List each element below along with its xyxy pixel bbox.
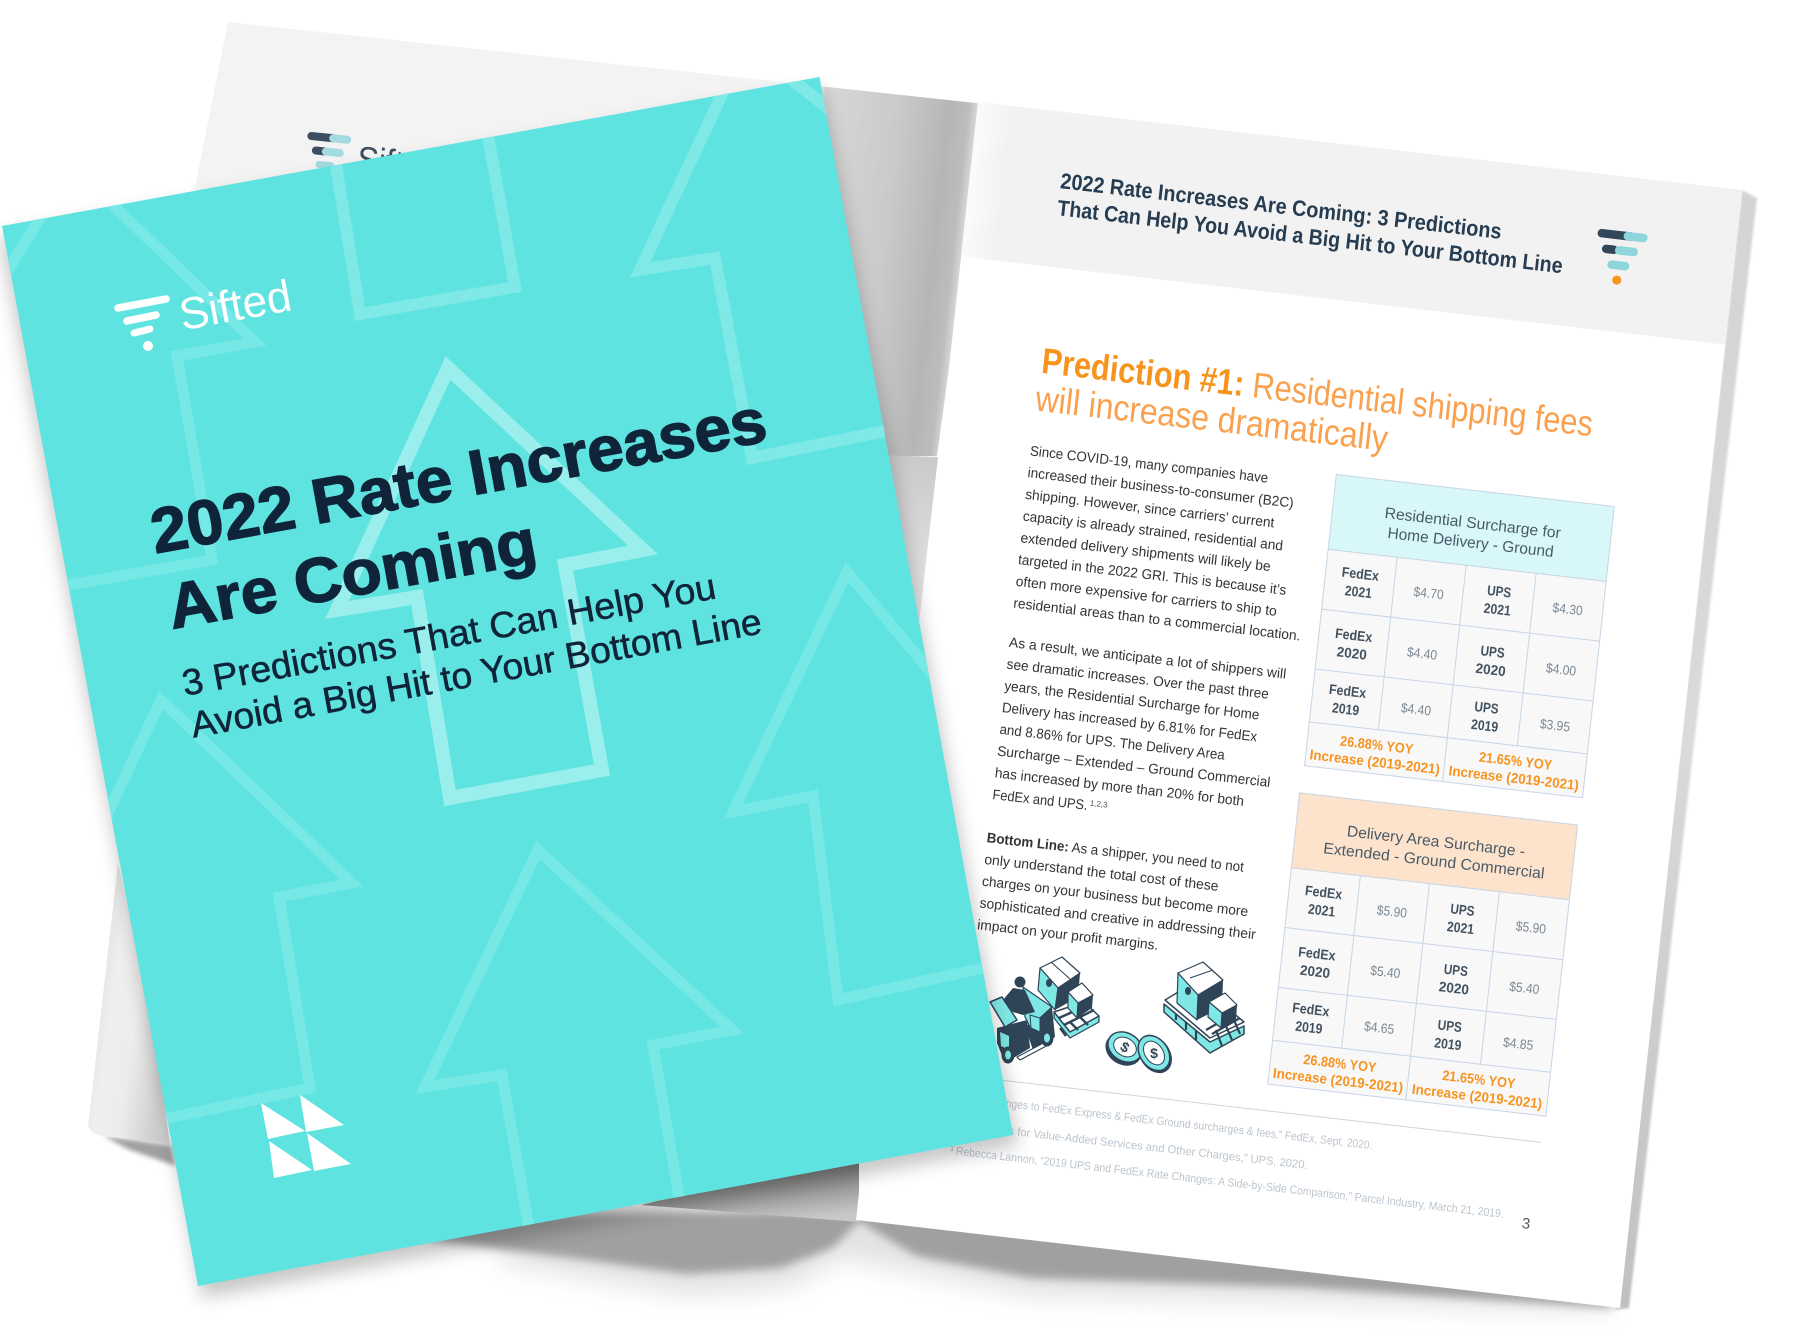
table: residential surcharge: Increase (2019-2021) <box>1309 746 1441 777</box>
table: delivery area surcharge: $4.85 <box>1502 1035 1534 1053</box>
cover title: 2022 Rate Increases <box>145 386 772 567</box>
forklift body <box>990 976 1055 1064</box>
table: delivery area surcharge: $5.40 <box>1370 963 1401 981</box>
table: delivery area surcharge: 2019 <box>1295 1018 1323 1037</box>
table header <box>1328 475 1614 581</box>
table: residential surcharge: 2021 <box>1344 582 1373 601</box>
table: residential surcharge: 2020 <box>1475 660 1507 679</box>
body paragraph 1: often more expensive for carriers to ship to <box>1015 573 1278 619</box>
table header: Home Delivery - Ground <box>1387 525 1555 561</box>
footnotes: ¹ “Changes to FedEx Express & FedEx Ground surcharges & fees,” FedEx, Sept. 2020. <box>977 1095 1373 1152</box>
table: delivery area surcharge: 2021 <box>1307 901 1336 920</box>
table: residential surcharge: FedEx <box>1341 564 1380 584</box>
header title: 2022 Rate Increases Are Coming: 3 Predictions <box>1059 168 1503 244</box>
table: delivery area surcharge: 26.88% YOY <box>1303 1051 1378 1075</box>
body paragraph 2: and 8.86% for UPS. The Delivery Area <box>999 721 1226 763</box>
table: residential surcharge: $4.30 <box>1552 600 1583 618</box>
table: delivery area surcharge: 2021 <box>1446 918 1475 937</box>
bottom line paragraph: only understand the total cost of these <box>984 851 1220 894</box>
table: delivery area surcharge: 2020 <box>1438 978 1470 998</box>
header title: That Can Help You Avoid a Big Hit to Your Bottom Line <box>1056 195 1564 278</box>
body paragraph 1: increased their business-to-consumer (B2C) <box>1027 464 1295 511</box>
table: residential surcharge <box>1305 475 1614 798</box>
table: residential surcharge: $4.00 <box>1545 660 1577 679</box>
table: delivery area surcharge: FedEx <box>1298 943 1336 964</box>
shadow under spine and cover <box>103 1136 1612 1312</box>
body paragraph 2: 1,2,3 <box>1089 799 1109 810</box>
table: delivery area surcharge: UPS <box>1450 900 1475 919</box>
body paragraph 1: capacity is already strained, residential and <box>1022 508 1284 553</box>
illustration: coins: $ <box>1118 1038 1133 1056</box>
table: delivery area surcharge: $4.65 <box>1363 1019 1395 1037</box>
page number: 3 <box>1521 1215 1531 1233</box>
illustration: coins <box>1100 1025 1179 1080</box>
table: residential surcharge: $4.40 <box>1400 700 1432 719</box>
illustration: boxes on pallet <box>1164 962 1244 1053</box>
cover subtitle: 3 Predictions That Can Help You <box>179 566 719 704</box>
table: residential surcharge: 2020 <box>1336 643 1368 663</box>
table: residential surcharge: 2021 <box>1483 600 1512 619</box>
table: delivery area surcharge: FedEx <box>1292 999 1330 1019</box>
table: residential surcharge: Increase (2019-2021) <box>1448 762 1580 793</box>
body paragraph 2: see dramatic increases. Over the past three <box>1006 656 1270 702</box>
pallet <box>1164 985 1244 1053</box>
table: delivery area surcharge: 2020 <box>1299 962 1331 981</box>
bottom line paragraph <box>977 829 1264 964</box>
background arrow outlines <box>0 78 1010 1290</box>
heading: prediction 1: Prediction #1: Residential shipping fees <box>1040 340 1595 444</box>
footnotes: ² “Rates for Value-Added Services and Other Charges,” UPS, 2020. <box>974 1122 1308 1172</box>
left page logo <box>303 132 441 187</box>
body paragraph 2 <box>992 634 1287 834</box>
page header band <box>961 102 1742 345</box>
bottom line paragraph: Bottom Line: As a shipper, you need to not <box>986 829 1245 875</box>
table: delivery area surcharge: FedEx <box>1304 882 1343 902</box>
table: residential surcharge: $3.95 <box>1539 716 1571 735</box>
body paragraph 1: targeted in the 2022 GRI. This is because it’s <box>1017 551 1287 598</box>
body paragraph 2: FedEx and UPS. <box>992 786 1088 813</box>
table: delivery area surcharge: $5.90 <box>1515 918 1547 937</box>
table: delivery area surcharge: Increase (2019-2021) <box>1272 1065 1404 1096</box>
table: residential surcharge: FedEx <box>1334 625 1373 645</box>
table: delivery area surcharge: $5.90 <box>1376 902 1408 921</box>
table: residential surcharge: UPS <box>1486 582 1512 601</box>
table: residential surcharge: 2019 <box>1470 716 1499 735</box>
icon: white Sifted funnel <box>118 299 166 350</box>
body paragraph 2: Delivery has increased by 6.81% for FedEx <box>1001 699 1258 744</box>
table: residential surcharge: UPS <box>1480 642 1506 661</box>
table: residential surcharge: 21.65% YOY <box>1478 749 1554 773</box>
body paragraph 2: has increased by more than 20% for both <box>994 764 1245 809</box>
table: delivery area surcharge: 21.65% YOY <box>1442 1067 1517 1091</box>
panel: teal front cover <box>0 77 1013 1290</box>
table: residential surcharge: UPS <box>1474 698 1499 717</box>
bottom line paragraph: impact on your profit margins. <box>977 916 1159 953</box>
table: delivery area surcharge: Increase (2019-2021) <box>1411 1081 1543 1112</box>
table header: Residential Surcharge for <box>1384 505 1562 542</box>
illustration: forklift with boxes <box>990 957 1099 1064</box>
table: residential surcharge: $4.40 <box>1406 644 1438 663</box>
table: delivery area surcharge: 2019 <box>1433 1034 1462 1053</box>
bottom line paragraph: sophisticated and creative in addressing their <box>979 894 1257 942</box>
body paragraph 2: years, the Residential Surcharge for Home <box>1004 677 1261 723</box>
cover text block <box>109 191 805 746</box>
icon: Sifted funnel logo <box>1592 228 1648 288</box>
table: residential surcharge: 2019 <box>1331 699 1360 718</box>
cover title <box>145 386 786 643</box>
body paragraph 2: Surcharge – Extended – Ground Commercial <box>996 743 1271 790</box>
icon: white triangle mark <box>261 1095 351 1178</box>
table header: Extended - Ground Commercial <box>1322 840 1545 883</box>
body paragraph 1: extended delivery shipments will likely be <box>1020 529 1272 574</box>
footnotes: ³ Rebecca Lannon, “2019 UPS and FedEx Rate Changes: A Side-by-Side Comparison,” Parcel Industry, March 21, 2019. <box>949 1145 1504 1221</box>
table header <box>1291 793 1578 900</box>
table: residential surcharge: $4.70 <box>1413 584 1444 602</box>
pallet under forklift load <box>1054 1002 1099 1038</box>
body paragraph 1: Since COVID-19, many companies have <box>1029 442 1269 486</box>
cover subtitle: Avoid a Big Hit to Your Bottom Line <box>187 601 765 746</box>
right page edge thickness <box>1614 190 1757 1310</box>
bottom line paragraph: charges on your business but become more <box>981 873 1249 919</box>
body paragraph 1: residential areas than to a commercial location. <box>1013 595 1301 644</box>
body paragraph 1: shipping. However, since carriers’ current <box>1025 486 1275 530</box>
illustration: coins: $ <box>1150 1045 1158 1061</box>
table: residential surcharge: FedEx <box>1328 681 1367 701</box>
right page of open brochure <box>856 102 1742 1308</box>
left page logo: Sifted <box>355 138 441 187</box>
body paragraph 2: As a result, we anticipate a lot of shippers will <box>1008 634 1287 682</box>
table: delivery area surcharge: UPS <box>1437 1017 1463 1035</box>
table: delivery area surcharge: $5.40 <box>1509 979 1540 997</box>
table: delivery area surcharge: UPS <box>1443 961 1469 979</box>
heading: prediction 1: will increase dramatically <box>1033 378 1390 459</box>
table header: Delivery Area Surcharge - <box>1346 823 1526 861</box>
footnotes <box>949 1075 1541 1224</box>
left page of open brochure <box>88 22 985 1144</box>
cover title: Are Coming <box>162 506 542 643</box>
Sifted wordmark: Sifted <box>175 272 295 340</box>
table: delivery area surcharge <box>1268 793 1578 1116</box>
body paragraph 1 <box>1013 442 1318 644</box>
cover drop shadow <box>0 88 1018 1298</box>
table: residential surcharge: 26.88% YOY <box>1339 733 1415 757</box>
